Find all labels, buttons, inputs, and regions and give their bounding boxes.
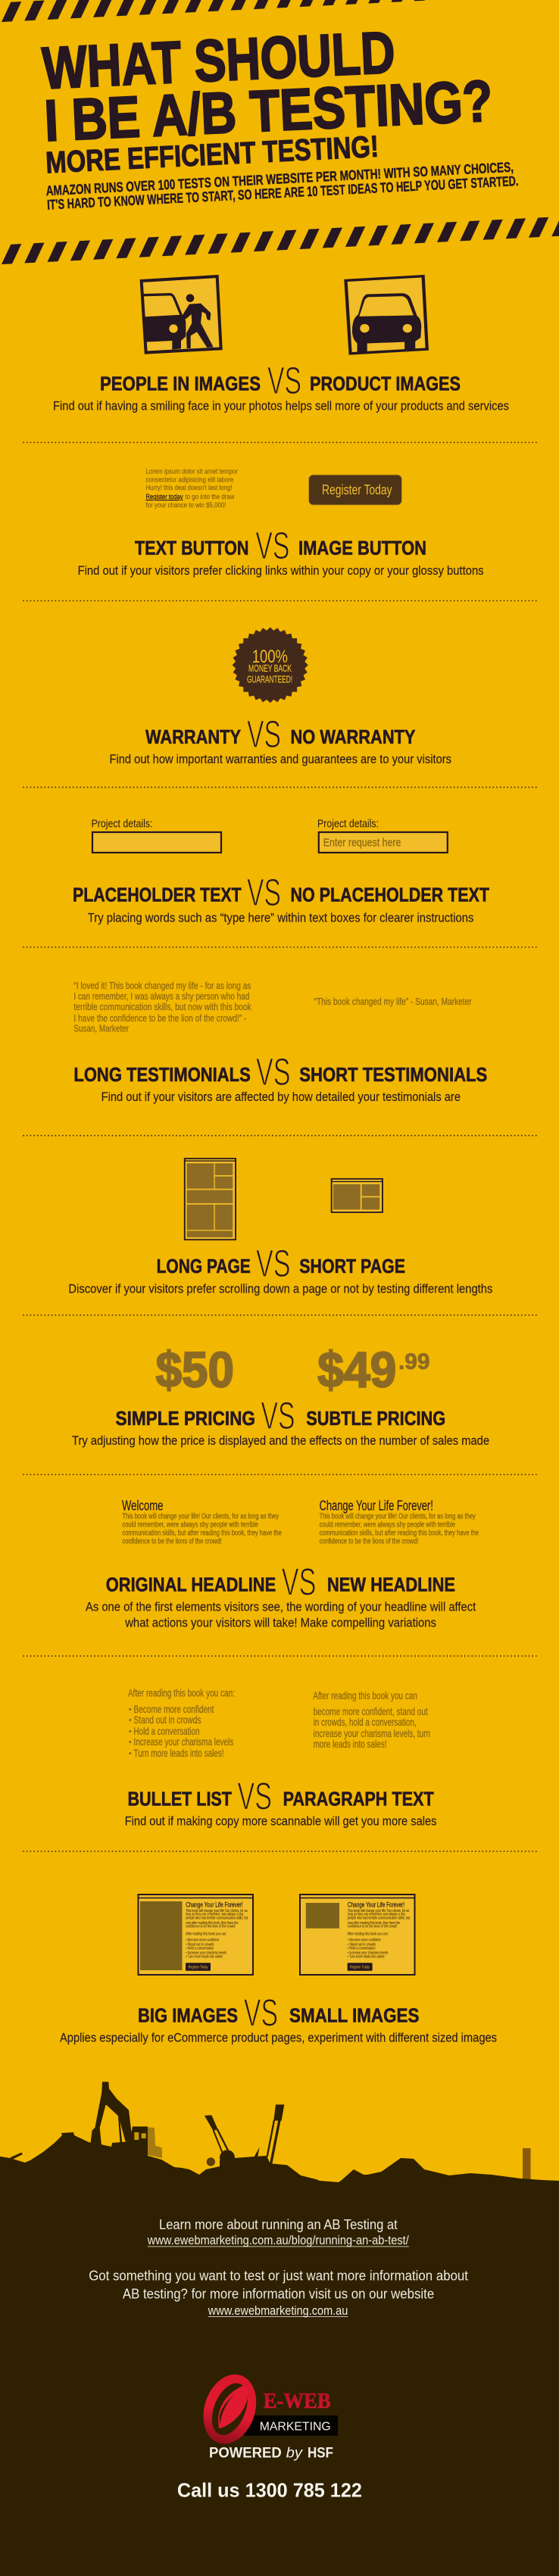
long testimonial: I can remember, I was always a shy person who had	[73, 991, 249, 1002]
price: $49.99: .99	[398, 1349, 430, 1374]
new headline example: Change Your Life Forever!	[320, 1498, 433, 1513]
icon: long page wireframe	[185, 1159, 236, 1240]
section 7 heading: Try adjusting how the price is displayed and the effects on the number of sales made	[72, 1434, 489, 1448]
section 8 heading: what actions your visitors will take! Make compelling variations	[124, 1617, 436, 1630]
section 9 heading: BULLET LIST	[127, 1787, 232, 1810]
section 10 heading: Applies especially for eCommerce product pages, experiment with different sized images	[60, 2032, 497, 2045]
page mockup: small image: • Stand out in crowds	[348, 1942, 376, 1947]
page mockup: small image: • Hold a conversation	[348, 1947, 376, 1951]
paragraph example: increase your charisma levels, turn	[314, 1727, 430, 1739]
page mockup: small image: people who had terrible communication skills, but	[348, 1916, 411, 1921]
new headline example: This book will change your life! Our clients, for as long as they	[320, 1512, 476, 1521]
logo emblem	[195, 2368, 265, 2451]
section 2 heading	[78, 524, 484, 578]
text link example: Register today	[145, 493, 183, 501]
section 7 heading	[72, 1394, 489, 1448]
section 7 heading: SUBTLE PRICING	[306, 1407, 445, 1430]
page mockup: small image: After reading this book you can:	[348, 1932, 389, 1937]
new headline example	[320, 1498, 479, 1546]
chimney	[523, 2148, 530, 2180]
page mockup: small image: • Turn more leads into sales!	[348, 1955, 385, 1960]
page mockup: big image: • Become more confident	[186, 1938, 219, 1943]
paragraph example	[313, 1689, 430, 1750]
icon: money back guarantee badge: 100%	[252, 647, 288, 667]
page mockup: big image: • Turn more leads into sales!	[186, 1955, 223, 1960]
section 3 heading	[109, 713, 451, 766]
section 6 heading	[68, 1242, 492, 1296]
text link example: for your chance to win $5,000!	[145, 501, 226, 510]
original headline example	[122, 1498, 282, 1546]
section 10 heading: BIG IMAGES	[138, 2004, 238, 2026]
original headline example: could remember, were always shy people with terrible	[122, 1520, 258, 1530]
page mockup: big image: now after reading this book, they have the	[186, 1921, 239, 1926]
image button example: Register Today	[322, 482, 392, 497]
page mockup: big image: This book will change your life! Our clients, for as	[186, 1909, 248, 1913]
title block	[41, 19, 519, 213]
section 1 heading: PEOPLE IN IMAGES	[100, 373, 261, 395]
original headline example: This book will change your life! Our clients, for as long as they	[122, 1512, 280, 1521]
icon: money back guarantee badge: GUARANTEED!	[247, 674, 292, 685]
section 4 heading: NO PLACEHOLDER TEXT	[291, 884, 489, 906]
logo: E-Web Marketing	[195, 2368, 338, 2451]
page mockup: small image: Register Today	[350, 1966, 370, 1970]
section 6 heading: LONG PAGE	[157, 1255, 251, 1277]
footer links: AB testing? for more information visit us on our website	[123, 2287, 434, 2302]
footer links	[89, 2217, 468, 2318]
title line 1: WHAT SHOULD	[41, 19, 396, 101]
new headline example: communication skills, but after reading this book, they have the	[320, 1529, 479, 1538]
section 10 heading: VS	[244, 1991, 278, 2034]
page mockup: big image: • Increase your charisma levels	[186, 1951, 226, 1956]
hazard stripes: below title	[0, 215, 559, 266]
section 2 heading: IMAGE BUTTON	[298, 537, 426, 560]
icon: money back guarantee badge	[233, 627, 308, 703]
section 2 heading: Find out if your visitors prefer clicking links within your copy or your glossy buttons	[78, 564, 484, 578]
page mockup: big image: Change Your Life Forever!	[186, 1901, 242, 1910]
original headline example: confidence to be the lions of the crowd!	[122, 1537, 222, 1546]
form field with placeholder: Project details:	[317, 818, 379, 831]
page mockup: big image: • Hold a conversation	[186, 1947, 214, 1951]
new headline example: confidence to be the lions of the crowd!	[320, 1537, 418, 1546]
bullet list example: Increase your charisma levels	[133, 1736, 233, 1748]
section 8 heading: VS	[282, 1560, 316, 1604]
section 5 heading: VS	[256, 1050, 291, 1093]
paragraph example: in crowds, hold a conversation,	[314, 1716, 417, 1728]
subtitle: MORE EFFICIENT TESTING!	[45, 130, 379, 179]
footer links: Got something you want to test or just want more information about	[89, 2269, 468, 2284]
section 3 heading: WARRANTY	[145, 725, 241, 748]
construction site silhouette	[0, 2082, 559, 2576]
page mockup: small image: This book will change your life! Our clients, for as	[348, 1909, 410, 1913]
bullet list example: After reading this book you can:	[128, 1687, 235, 1699]
page mockup: small image: now after reading this book, they have the	[348, 1921, 400, 1926]
drilling rigs	[205, 2104, 288, 2169]
section 4 heading: PLACEHOLDER TEXT	[73, 884, 242, 906]
footer links: www.ewebmarketing.com.au	[208, 2303, 348, 2318]
section 6 heading: Discover if your visitors prefer scrolling down a page or not by testing different lengths	[68, 1282, 492, 1296]
paragraph example: become more confident, stand out	[314, 1705, 428, 1717]
section 4 heading: VS	[247, 871, 281, 914]
paragraph example: more leads into sales!	[314, 1738, 387, 1750]
section 1 heading: PRODUCT IMAGES	[310, 373, 461, 395]
logo: E-Web Marketing: MARKETING	[260, 2420, 331, 2433]
price: $50: $50	[156, 1341, 234, 1397]
powered by line: HSF	[308, 2445, 333, 2462]
section 10 heading: SMALL IMAGES	[289, 2004, 419, 2026]
text link example: Lorem ipsum dolor sit amet tempor	[145, 468, 239, 476]
icon: car front	[345, 276, 427, 354]
section 8 heading: NEW HEADLINE	[327, 1573, 455, 1595]
section 6 heading: VS	[256, 1242, 291, 1285]
icon: person and car	[142, 276, 221, 353]
section 5 heading: SHORT TESTIMONIALS	[299, 1063, 487, 1086]
icon: money back guarantee badge: MONEY BACK	[248, 663, 292, 674]
long testimonial: Susan, Marketer	[73, 1024, 129, 1034]
long testimonial: terrible communication skills, but now with this book	[73, 1002, 251, 1012]
text link example: consectetur adipisicing elit labore	[145, 476, 233, 484]
text link example: Hurry! this deal doesn't last long!	[145, 484, 232, 492]
section 3 heading: NO WARRANTY	[291, 725, 415, 748]
original headline example: Welcome	[122, 1498, 164, 1513]
ground silhouette	[0, 2132, 559, 2576]
form field with placeholder: Enter request here	[323, 837, 401, 850]
page mockup: small image	[300, 1895, 415, 1975]
bullet list example: Become more confident	[133, 1703, 214, 1715]
long testimonial	[73, 981, 251, 1034]
page mockup: big image: Register Today	[188, 1966, 208, 1970]
page mockup: big image: long as they can remember, was always a shy	[186, 1913, 244, 1917]
page mockup: small image: confidence to be the lions of the crowd!	[348, 1924, 397, 1929]
long testimonial: “I loved it! This book changed my life - for as long as	[73, 981, 251, 991]
logo: E-Web Marketing: E-WEB	[264, 2389, 331, 2413]
section 1 heading: VS	[267, 359, 301, 402]
section 5 heading	[73, 1050, 487, 1104]
powered by line: by	[286, 2445, 303, 2462]
page mockup: small image: • Increase your charisma levels	[348, 1951, 389, 1956]
section 9 heading: Find out if making copy more scannable will get you more sales	[125, 1815, 436, 1829]
footer links: www.ewebmarketing.com.au/blog/running-an-ab-test/	[147, 2233, 409, 2247]
long testimonial: I have the confidence to be the lion of the crowd!” -	[73, 1013, 246, 1024]
section 7 heading: SIMPLE PRICING	[115, 1407, 255, 1430]
section 9 heading: VS	[237, 1775, 272, 1817]
section 8 heading: As one of the first elements visitors see, the wording of your headline will affect	[86, 1601, 476, 1614]
new headline example: could remember, were always shy people with terrible	[320, 1520, 455, 1530]
section 6 heading: SHORT PAGE	[299, 1255, 405, 1277]
page mockup: big image	[138, 1895, 253, 1975]
short testimonial: “This book changed my life” - Susan, Marketer	[314, 996, 472, 1007]
logo marketing bar	[244, 2415, 338, 2436]
price: $49.99: $49	[317, 1341, 396, 1397]
footer links: Learn more about running an AB Testing at	[159, 2217, 398, 2232]
section 4 heading: Try placing words such as “type here” within text boxes for clearer instructions	[88, 912, 473, 925]
section 2 heading: TEXT BUTTON	[135, 537, 248, 560]
section 9 heading	[125, 1775, 436, 1829]
page mockup: small image: Change Your Life Forever!	[348, 1901, 404, 1910]
section 8 heading: ORIGINAL HEADLINE	[106, 1573, 276, 1595]
page mockup: big image: After reading this book you can:	[186, 1932, 226, 1937]
section 3 heading: VS	[247, 713, 281, 756]
excavator	[10, 2082, 162, 2160]
section 1 heading: Find out if having a smiling face in your photos helps sell more of your products and services	[53, 400, 509, 413]
paragraph example: After reading this book you can	[313, 1689, 417, 1701]
text link example	[145, 468, 239, 510]
page mockup: small image: long as they can remember, was always a shy	[348, 1913, 405, 1917]
hazard stripes: top	[0, 0, 559, 23]
phone call to action: Call us 1300 785 122	[177, 2478, 362, 2501]
page mockup: big image: confidence to be the lions of the crowd!	[186, 1924, 236, 1929]
section 4 heading	[73, 871, 489, 925]
bullet list example: Turn more leads into sales!	[133, 1747, 224, 1759]
section 5 heading: Find out if your visitors are affected by how detailed your testimonials are	[101, 1090, 461, 1104]
page mockup: small image: • Become more confident	[348, 1938, 381, 1943]
section 5 heading: LONG TESTIMONIALS	[73, 1063, 251, 1086]
section 3 heading: Find out how important warranties and guarantees are to your visitors	[109, 753, 451, 766]
bullet list example	[128, 1687, 235, 1759]
section 7 heading: VS	[261, 1394, 295, 1437]
empty form field: Project details:	[91, 818, 153, 831]
bullet list example: Stand out in crowds	[133, 1714, 201, 1726]
bullet list example: Hold a conversation	[133, 1725, 200, 1737]
icon: short page wireframe	[332, 1179, 383, 1212]
image button example	[309, 475, 401, 505]
page mockup: big image: people who had terrible communication skills, but	[186, 1916, 248, 1921]
page mockup: big image: • Stand out in crowds	[186, 1942, 214, 1947]
empty form field	[91, 818, 221, 853]
original headline example: communication skills, but after reading this book, they have the	[122, 1529, 282, 1538]
powered by line: POWERED	[209, 2445, 282, 2462]
section 9 heading: PARAGRAPH TEXT	[283, 1787, 434, 1810]
section 8 heading	[86, 1560, 476, 1630]
section 2 heading: VS	[255, 524, 289, 567]
section 10 heading	[60, 1991, 497, 2045]
powered by line	[209, 2445, 333, 2462]
section 1 heading	[53, 359, 509, 413]
text link example: to go into the draw	[185, 493, 235, 501]
form field with placeholder	[317, 818, 448, 853]
